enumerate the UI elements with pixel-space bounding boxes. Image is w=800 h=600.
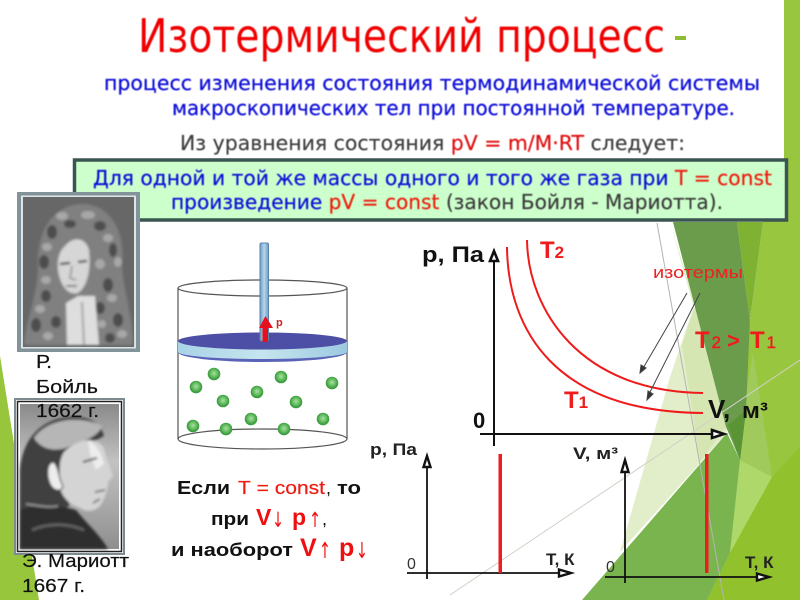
definition text: макроскопических тел при постоянной температуре. bbox=[172, 96, 735, 120]
conclusion text: ↓ bbox=[272, 508, 284, 532]
definition text bbox=[104, 71, 760, 120]
law callout box bbox=[74, 160, 786, 220]
pT labels: р, Па bbox=[370, 440, 418, 459]
Boyle caption: 1662 г. bbox=[36, 401, 99, 421]
main pV graph: Т2 bbox=[540, 237, 564, 264]
portrait: Mariotte bbox=[14, 398, 125, 555]
isotherm T1 bbox=[507, 247, 703, 413]
conclusion text: при bbox=[211, 509, 249, 529]
VT isotherm bbox=[705, 454, 708, 573]
main pV graph: м³ bbox=[742, 398, 768, 423]
VT graph: 0 bbox=[606, 559, 615, 576]
main pV graph: 0 bbox=[473, 408, 485, 433]
isotherm T2 bbox=[527, 240, 703, 393]
cylinder base bbox=[178, 429, 347, 449]
Boyle caption: Р. bbox=[36, 352, 52, 372]
title: Изотермический процесс bbox=[138, 9, 665, 63]
pressure arrow bbox=[259, 316, 273, 342]
isotherm pointer arrows bbox=[640, 293, 700, 400]
conclusion text: ↓ bbox=[356, 539, 368, 564]
conclusion text bbox=[171, 478, 368, 564]
pT isotherm bbox=[498, 454, 502, 573]
pT graph: 0 bbox=[407, 556, 416, 573]
piston rod bbox=[260, 243, 268, 341]
portrait: Boyle bbox=[17, 192, 140, 352]
conclusion text: , bbox=[322, 509, 327, 529]
definition text: процесс изменения состояния термодинамической системы bbox=[104, 71, 760, 95]
Mariotte caption bbox=[22, 551, 129, 596]
VT graph: Т, К bbox=[745, 553, 774, 572]
VT graph bbox=[573, 444, 774, 583]
VT axes bbox=[605, 460, 769, 583]
cylinder top rim bbox=[178, 280, 347, 296]
pV labels: р, Па bbox=[422, 242, 485, 267]
main pV graph: 2 bbox=[712, 333, 721, 352]
conclusion text: ↑ bbox=[319, 539, 331, 564]
conclusion text: р bbox=[339, 534, 354, 562]
conclusion text: Если bbox=[177, 478, 230, 498]
main pV graph: V, bbox=[708, 394, 730, 424]
conclusion text: ↑ bbox=[309, 508, 321, 532]
conclusion text: , bbox=[326, 478, 331, 498]
title dash bbox=[675, 36, 686, 40]
conclusion text: Т = const bbox=[238, 478, 325, 498]
gas molecules bbox=[187, 368, 338, 435]
Boyle caption: Бойль bbox=[36, 377, 98, 397]
callout text: произведение pV = const (закон Бойля - Мариотта). bbox=[171, 190, 723, 214]
callout text bbox=[93, 166, 772, 214]
cylinder walls bbox=[178, 288, 347, 439]
piston disc bbox=[178, 332, 347, 362]
main pV graph: > bbox=[727, 328, 740, 353]
VT labels: V, м³ bbox=[573, 444, 618, 463]
conclusion text: V bbox=[300, 534, 317, 562]
conclusion text: V bbox=[256, 504, 272, 530]
Mariotte caption: 1667 г. bbox=[22, 576, 85, 596]
main pV graph: изотермы bbox=[653, 263, 743, 282]
pT axes bbox=[407, 456, 571, 579]
main pV graph: 1 bbox=[766, 333, 776, 352]
pressure label: p bbox=[276, 317, 283, 329]
Boyle caption bbox=[36, 352, 99, 421]
callout text: Для одной и той же массы одного и того же газа при Т = const bbox=[93, 166, 772, 190]
pT graph: Т, К bbox=[546, 550, 575, 569]
pV axes bbox=[480, 251, 724, 446]
main pV graph: Т bbox=[695, 327, 710, 354]
piston cylinder diagram bbox=[178, 243, 347, 449]
conclusion text: р bbox=[292, 504, 306, 530]
main pV graph: Т1 bbox=[564, 387, 588, 414]
Mariotte caption: Э. Мариотт bbox=[22, 551, 129, 571]
pT graph bbox=[370, 440, 575, 579]
conclusion text: и наоборот bbox=[171, 540, 293, 560]
conclusion text: то bbox=[337, 478, 361, 498]
main pV graph: Т bbox=[750, 327, 765, 354]
equation line: Из уравнения состояния pV = m/M·RT следует: bbox=[180, 131, 685, 155]
main pV graph bbox=[422, 237, 776, 446]
